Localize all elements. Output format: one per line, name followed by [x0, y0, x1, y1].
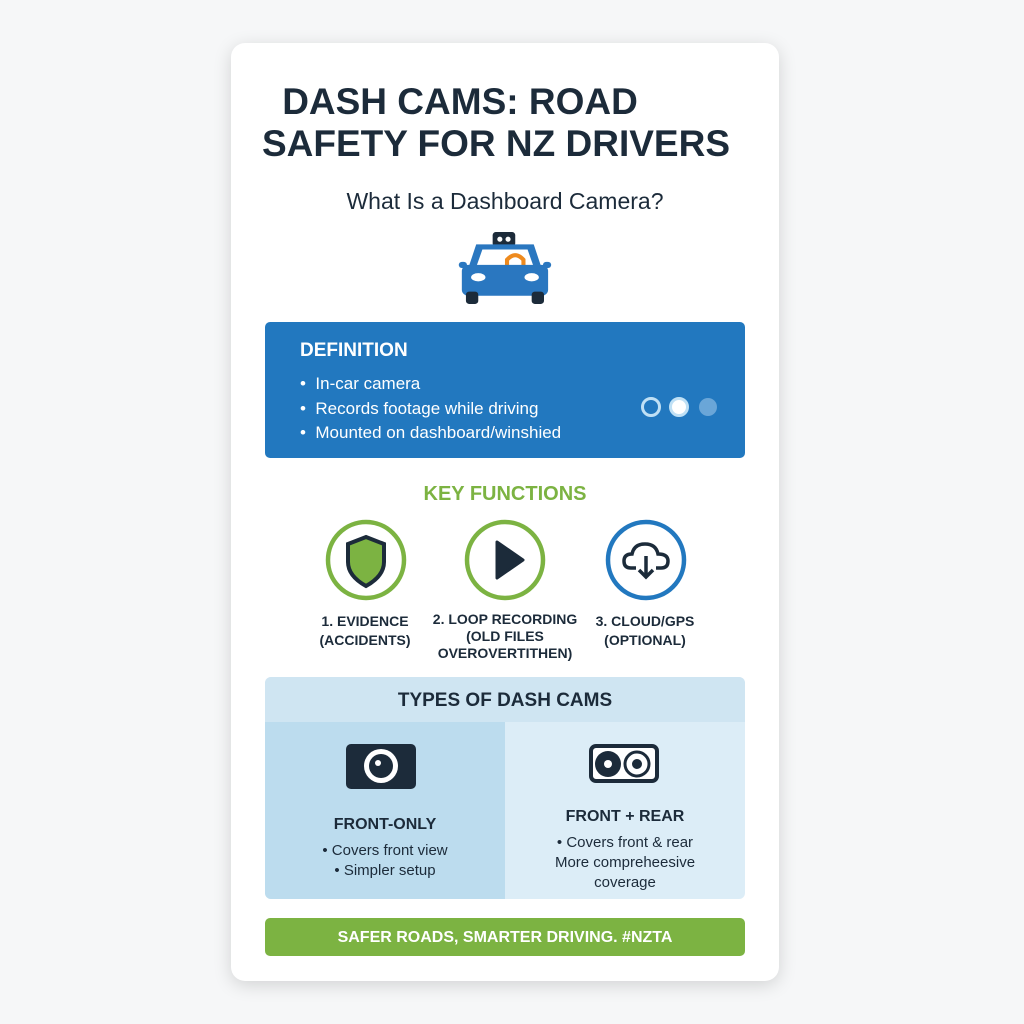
title: SAFETY FOR NZ DRIVERS [262, 123, 730, 164]
type: front-only: • Simpler setup [334, 862, 436, 879]
heading: key functions: KEY FUNCTIONS [424, 483, 586, 505]
definition bullets: • In-car camera [300, 374, 420, 393]
definition bullets: • Records footage while driving [300, 398, 538, 418]
function: cloud/gps [596, 520, 694, 648]
panel: definition [265, 322, 745, 458]
icon: car with dash cam [458, 232, 552, 304]
type: front-only: • Covers front view [322, 842, 448, 859]
types heading: TYPES OF DASH CAMS [398, 690, 612, 711]
type: front + rear [555, 744, 695, 891]
function: evidence: 1. EVIDENCE [321, 613, 409, 629]
pagination dots [641, 397, 717, 417]
definition heading: DEFINITION [300, 340, 408, 361]
icon: shield [326, 520, 406, 600]
title [262, 81, 730, 164]
card [231, 43, 779, 981]
function: loop recording: 2. LOOP RECORDING [433, 611, 577, 627]
function: cloud/gps: (OPTIONAL) [604, 632, 686, 648]
type: front-only: FRONT-ONLY [334, 816, 436, 833]
type: front + rear: FRONT + REAR [566, 808, 684, 825]
icon: cloud [606, 520, 686, 600]
definition bullets: • Mounted on dashboard/winshied [300, 423, 561, 442]
definition bullets [300, 374, 561, 442]
type: front-only [265, 722, 505, 899]
function: loop recording: (OLD FILES [466, 628, 544, 644]
title: DASH CAMS: ROAD [282, 81, 638, 122]
icon: single camera [346, 744, 416, 789]
function: evidence: (ACCIDENTS) [320, 632, 410, 648]
function: loop recording [433, 520, 577, 661]
type: front + rear: coverage [594, 874, 656, 891]
type: front + rear: More compreheesive [555, 854, 695, 871]
icon: dual camera [589, 744, 659, 783]
footer banner [265, 918, 745, 956]
panel: types of dash cams [265, 677, 745, 899]
types heading [265, 677, 745, 722]
type: front + rear: • Covers front & rear [557, 834, 693, 851]
footer banner: SAFER ROADS, SMARTER DRIVING. #NZTA [338, 929, 672, 946]
icon: play [464, 520, 546, 600]
function: cloud/gps: 3. CLOUD/GPS [596, 613, 694, 629]
function: evidence [320, 520, 410, 648]
function: loop recording: OVEROVERTITHEN) [438, 645, 572, 661]
subtitle: What Is a Dashboard Camera? [346, 188, 664, 214]
